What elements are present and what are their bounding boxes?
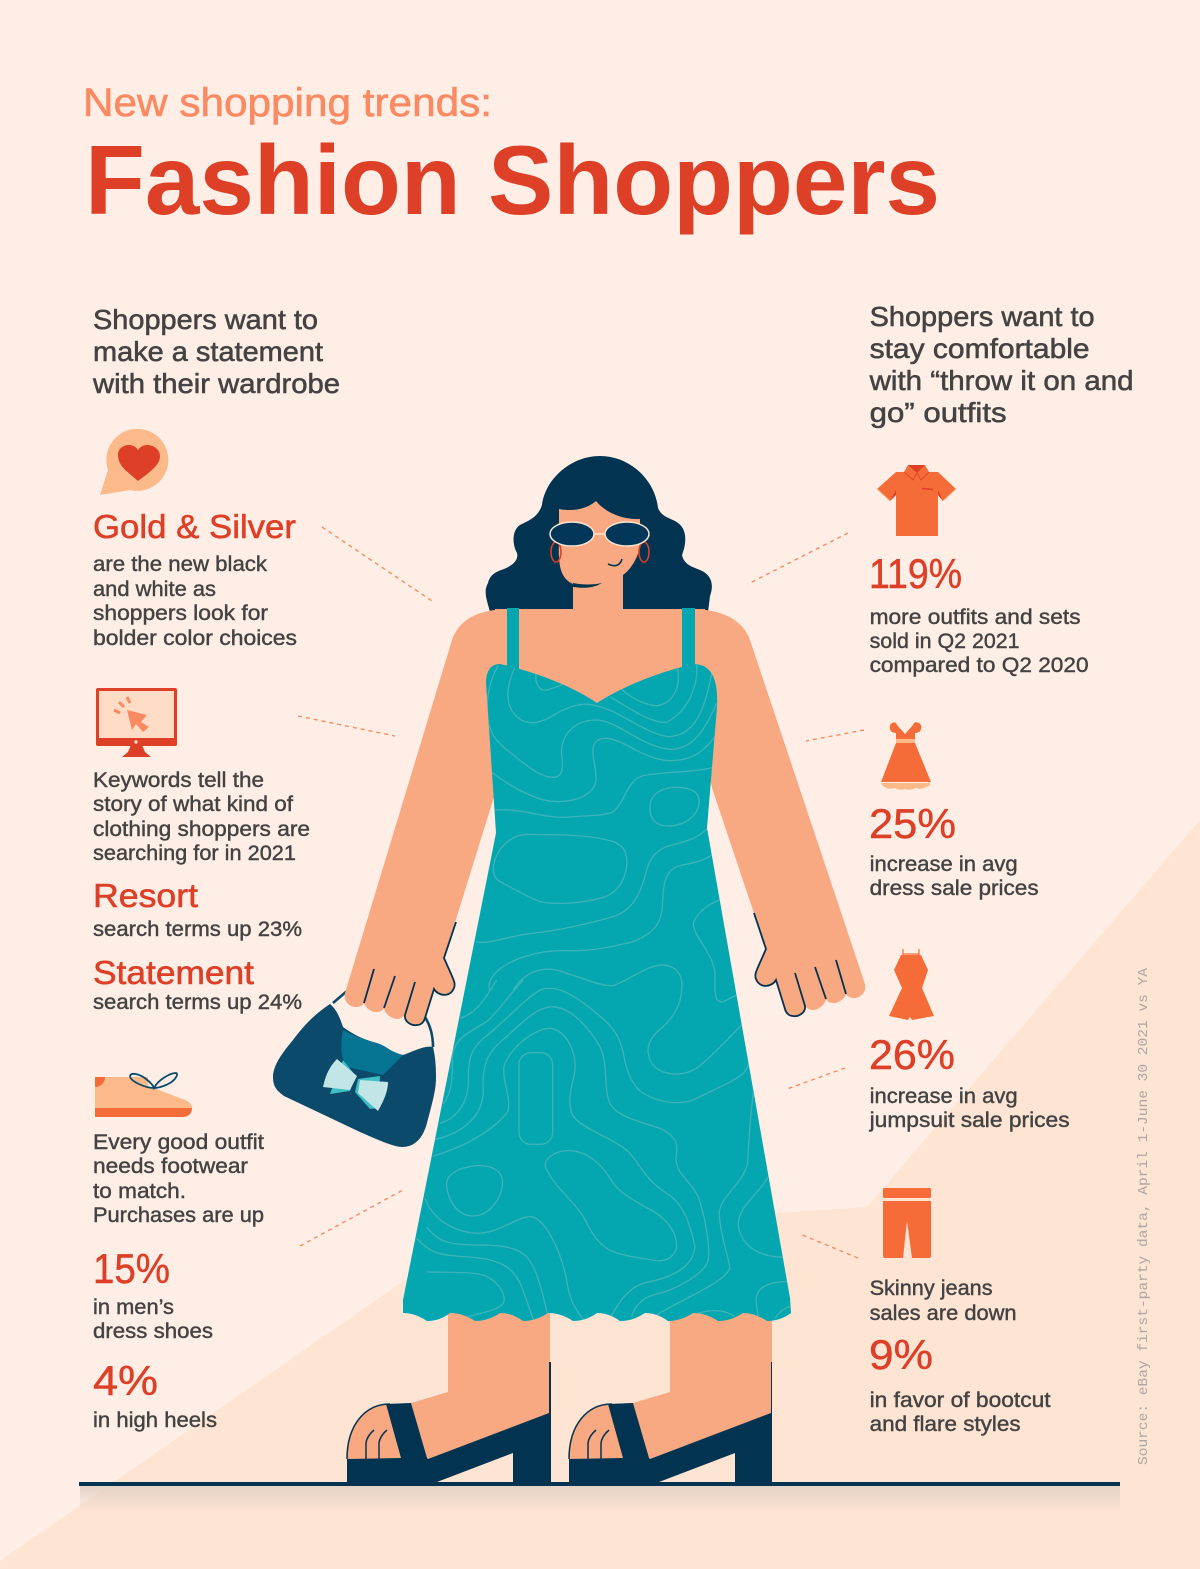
subtitle: New shopping trends: [83, 81, 492, 125]
4% stat: 4% [93, 1357, 158, 1404]
9% stat: Skinny jeans [870, 1277, 993, 1300]
keywords text: story of what kind of [93, 793, 293, 816]
gold and silver stat: Gold & Silver [93, 508, 296, 545]
chin shadow [573, 583, 602, 588]
right heading: Shoppers want to [870, 301, 1095, 332]
statement stat: search terms up 24% [93, 991, 302, 1014]
gold and silver stat: and white as [93, 578, 216, 601]
floor shadow [80, 1485, 1120, 1513]
119% stat: more outfits and sets [870, 606, 1081, 629]
26% stat: jumpsuit sale prices [869, 1109, 1070, 1132]
4% stat: in high heels [93, 1409, 217, 1432]
15% stat [93, 1245, 213, 1343]
background lighter-peach shape [0, 820, 1200, 1569]
9% stat [869, 1277, 1051, 1436]
left heading: Shoppers want to [93, 304, 318, 335]
bag handle [333, 991, 433, 1047]
bow wings [323, 1059, 388, 1111]
statement stat: Statement [93, 954, 254, 991]
icon: dress [881, 722, 931, 790]
right sandal [569, 1362, 772, 1482]
source note: Source: eBay first-party data, April 1-June 30 2021 vs YA [1137, 967, 1152, 1465]
left sandal [347, 1362, 551, 1482]
title block [83, 81, 940, 235]
keywords text: clothing shoppers are [93, 818, 310, 841]
resort stat [93, 877, 302, 941]
floor line [79, 1482, 1120, 1486]
footwear text: to match. [93, 1180, 186, 1203]
9% stat: sales are down [870, 1302, 1017, 1325]
legs and sandals [347, 1300, 772, 1482]
left column [92, 304, 340, 1432]
bag body [273, 1004, 436, 1147]
dress contour pattern [417, 664, 790, 1320]
25% stat: increase in avg [870, 853, 1018, 876]
9% stat: in favor of bootcut [870, 1389, 1051, 1412]
15% stat: dress shoes [93, 1320, 213, 1343]
icon: speech bubble with heart [100, 429, 168, 495]
25% stat: 25% [869, 800, 956, 847]
right hand linework [754, 913, 846, 1016]
footwear text: needs footwear [93, 1155, 248, 1178]
handbag [273, 1004, 436, 1147]
left toe detail [347, 1404, 390, 1459]
15% stat: 15% [93, 1245, 170, 1292]
119% stat [869, 550, 1089, 677]
25% stat [869, 800, 1039, 900]
keywords text: Keywords tell the [93, 769, 264, 792]
left foot [347, 1300, 550, 1459]
gold and silver stat: shoppers look for [93, 602, 268, 625]
hair [486, 456, 712, 612]
face and neck [559, 501, 640, 612]
sunglasses [550, 522, 649, 546]
keywords text: searching for in 2021 [93, 842, 296, 865]
gold and silver stat: are the new black [93, 553, 268, 576]
left heading: make a statement [93, 336, 323, 367]
footwear text [93, 1131, 264, 1227]
dashed connector lines [298, 527, 864, 1258]
4% stat [93, 1357, 217, 1432]
right heading: go” outfits [870, 397, 1007, 428]
119% stat: sold in Q2 2021 [870, 630, 1020, 653]
gold and silver stat [93, 508, 297, 650]
right heading: with “throw it on and [869, 365, 1134, 396]
chest [495, 609, 705, 719]
right heading: stay comfortable [870, 333, 1090, 364]
dress [403, 664, 791, 1321]
left hand linework [364, 922, 456, 1025]
right toe detail [569, 1404, 612, 1459]
right arm and shoulder [680, 609, 865, 1016]
right heading [869, 301, 1134, 428]
9% stat: 9% [869, 1331, 933, 1378]
26% stat: 26% [869, 1031, 955, 1078]
icon: shoe [95, 1073, 192, 1117]
gold and silver stat: bolder color choices [93, 627, 297, 650]
left heading: with their wardrobe [92, 368, 340, 399]
icon: polo shirt [877, 465, 956, 536]
smile [608, 559, 622, 566]
keywords text [93, 769, 310, 865]
119% stat: compared to Q2 2020 [870, 654, 1089, 677]
bag flap [341, 1030, 403, 1075]
resort stat: search terms up 23% [93, 918, 302, 941]
right foot [569, 1300, 772, 1459]
earrings [551, 542, 649, 562]
statement stat [93, 954, 302, 1014]
left arm and shoulder [345, 609, 530, 1025]
dress straps [507, 608, 695, 670]
resort stat: Resort [93, 877, 198, 914]
footwear text: Every good outfit [93, 1131, 264, 1154]
26% stat [869, 1031, 1070, 1132]
119% stat: 119% [869, 550, 962, 597]
main title: Fashion Shoppers [85, 125, 940, 235]
26% stat: increase in avg [870, 1085, 1018, 1108]
9% stat: and flare styles [870, 1413, 1021, 1436]
25% stat: dress sale prices [870, 877, 1039, 900]
footwear text: Purchases are up [93, 1204, 264, 1227]
bow back [330, 1060, 380, 1109]
icon: pants [883, 1188, 931, 1258]
icon: jumpsuit [889, 949, 934, 1020]
illustration: woman in teal dress [273, 456, 865, 1482]
15% stat: in men’s [93, 1296, 174, 1319]
icon: monitor with cursor [96, 688, 177, 757]
right column [869, 301, 1134, 1436]
left heading [92, 304, 340, 399]
